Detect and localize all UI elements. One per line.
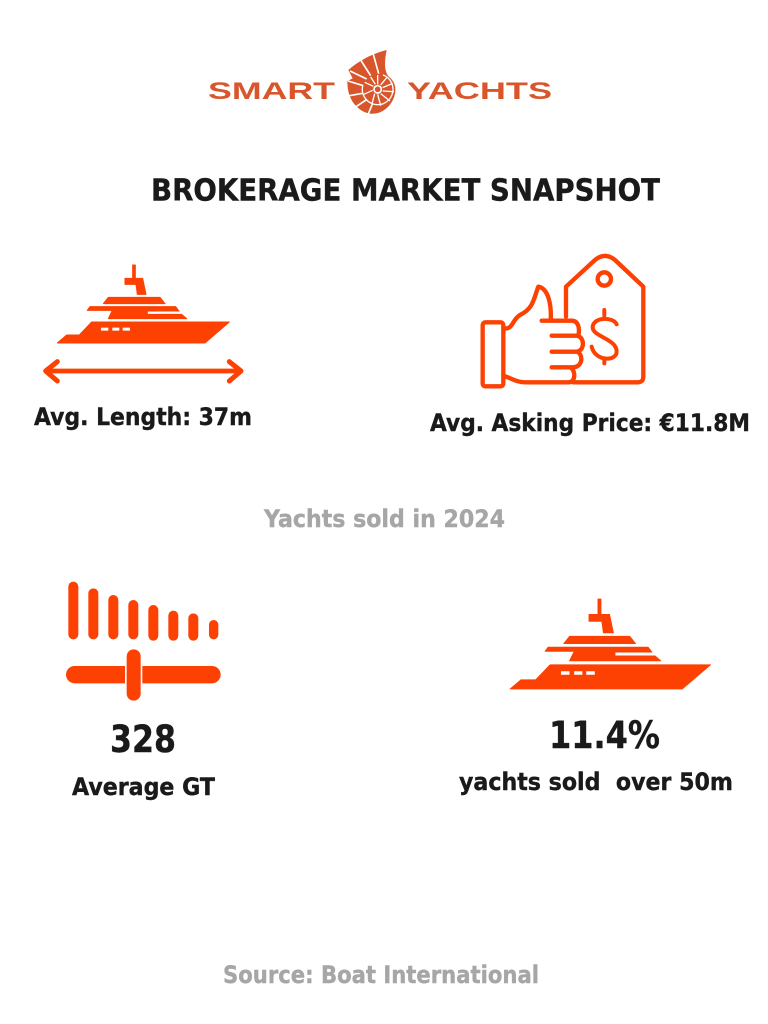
subheading: yachts sold in 2024: Yachts sold in 2024	[263, 505, 505, 533]
logo: Smart Yachts	[208, 50, 552, 114]
stat: 11.4%: 11.4%	[549, 714, 660, 757]
title: BROKERAGE MARKET SNAPSHOT	[151, 174, 660, 208]
panel: average length	[34, 265, 252, 431]
panel: average GT	[66, 582, 221, 801]
logo wordmark: YACHTS: YACHTS	[407, 78, 552, 105]
panel: average asking price	[430, 256, 750, 437]
icon: yacht	[57, 265, 229, 343]
logo wordmark: SMART: SMART	[208, 78, 336, 105]
label: average GT: Average GT	[72, 773, 216, 801]
arrow: length double-headed	[46, 362, 241, 381]
label: average length: Avg. Length: 37m	[34, 403, 252, 431]
icon: tonnage slider	[66, 582, 221, 701]
stat: 328: 328	[110, 718, 176, 761]
icon: yacht	[510, 599, 711, 689]
label: yachts sold over 50m: yachts sold over 50m	[459, 768, 733, 796]
source note: Source: Boat International	[223, 961, 539, 989]
panel: yachts sold over 50m	[459, 599, 733, 796]
logo icon: nautilus shell	[347, 50, 397, 114]
icon: thumbs up with price tag	[483, 256, 643, 386]
